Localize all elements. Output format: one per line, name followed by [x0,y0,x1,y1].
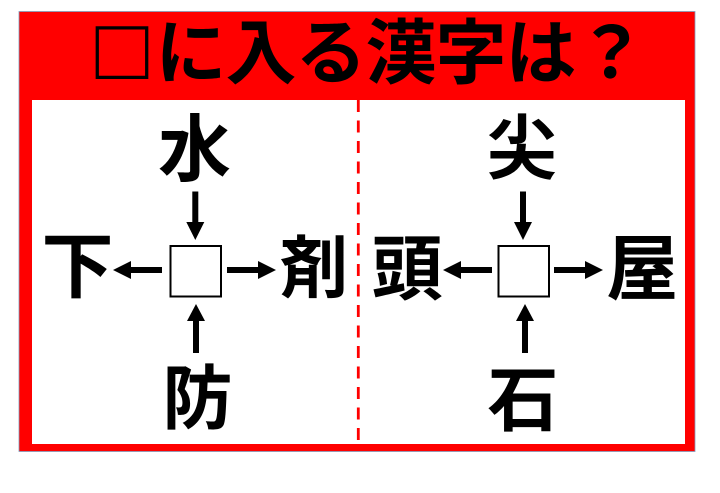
arrow up [516,304,534,353]
arrow up [187,304,205,353]
arrow right [227,261,276,279]
kanji right: 屋 [606,230,678,310]
panel: white puzzle area [32,100,685,444]
kanji bottom: 防 [162,360,232,438]
arrow left [443,261,492,279]
kanji top: 尖 [487,110,557,188]
kanji right: 剤 [280,231,348,307]
kanji top: 水 [158,110,231,191]
arrow right [554,261,603,279]
arrow down [514,192,532,240]
kanji left: 下 [41,228,114,308]
kanji bottom: 石 [487,362,559,441]
kanji left: 頭 [371,231,443,310]
blank box [170,246,221,296]
puzzle: left [41,110,348,438]
blank box [498,246,549,296]
arrow down [186,192,204,240]
arrow left [113,261,162,279]
title: □ [95,0,149,98]
title: に入る漢字は？ [155,15,646,94]
puzzle: right [371,110,678,441]
